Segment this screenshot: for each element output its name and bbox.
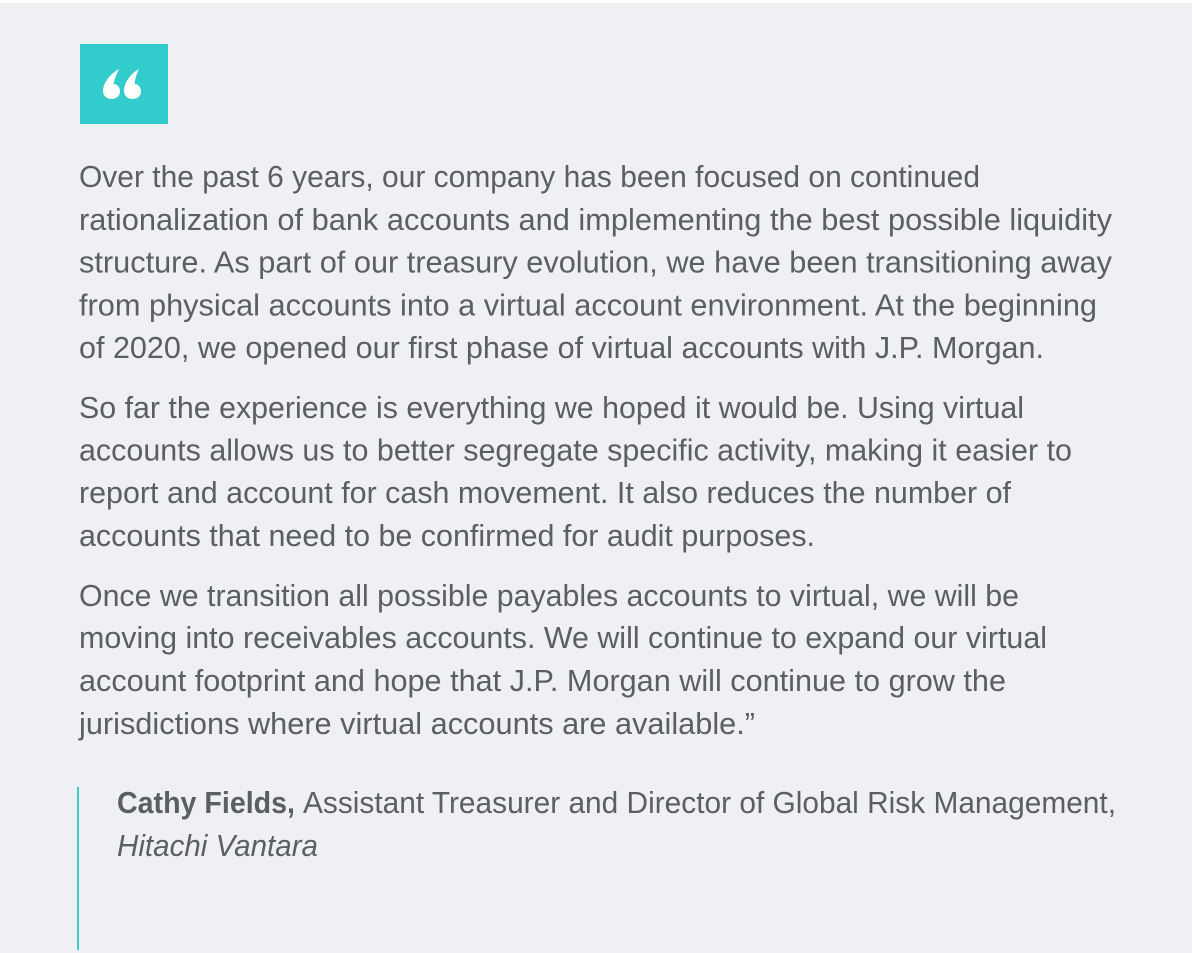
text block: third paragraph: account footprint and hope that J.P. Morgan will continue to grow the (79, 663, 1006, 698)
accent rule: attribution (77, 787, 79, 950)
text block: second paragraph: report and account for cash movement. It also reduces the number of (79, 475, 1011, 510)
text block: first paragraph: of 2020, we opened our first phase of virtual accounts with J.P. Morgan. (79, 330, 1044, 365)
text block: first paragraph: structure. As part of our treasury evolution, we have been transitioning away (79, 244, 1112, 280)
attribution (117, 785, 1116, 863)
attribution: Cathy Fields, (117, 785, 295, 820)
text block: third paragraph (78, 578, 1047, 741)
attribution: Assistant Treasurer and Director of Global Risk Management, (303, 785, 1116, 820)
text block: second paragraph: So far the experience is everything we hoped it would be. Using virtual (79, 390, 1024, 425)
text block: second paragraph: accounts that need to be confirmed for audit purposes. (79, 518, 815, 553)
attribution: Hitachi Vantara (117, 828, 318, 863)
text block: first paragraph (79, 159, 1112, 365)
text block: first paragraph: from physical accounts into a virtual account environment. At the beginning (79, 288, 1097, 322)
text block: third paragraph: moving into receivables accounts. We will continue to expand our virtual (79, 620, 1047, 655)
text block: second paragraph: accounts allows us to better segregate specific activity, making it easier to (79, 432, 1072, 468)
text block: second paragraph (79, 390, 1072, 553)
text block: first paragraph: Over the past 6 years, our company has been focused on continued (79, 159, 980, 194)
text block: third paragraph: jurisdictions where virtual accounts are available.” (78, 706, 755, 741)
text block: third paragraph: Once we transition all possible payables accounts to virtual, we will be (79, 578, 1019, 613)
icon: quotation mark (80, 44, 168, 124)
text block: first paragraph: rationalization of bank accounts and implementing the best possible liquidity (79, 202, 1112, 237)
